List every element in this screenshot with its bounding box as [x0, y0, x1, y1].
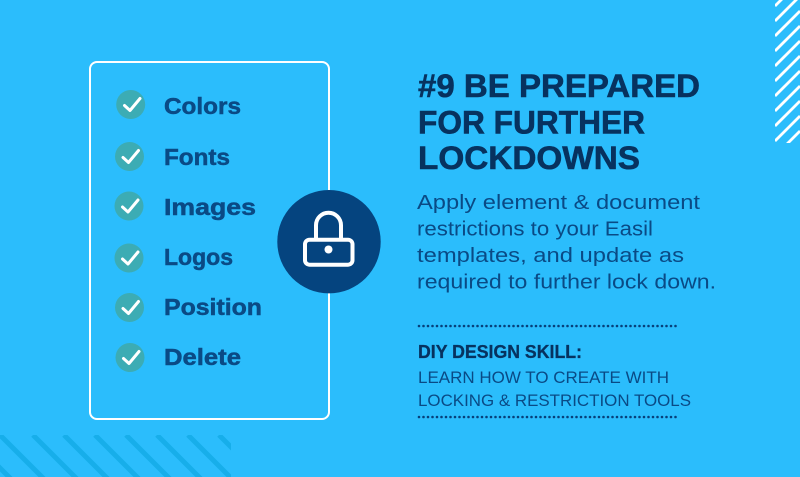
checklist item: Logos: Logos	[164, 244, 233, 270]
panel outline	[90, 62, 329, 419]
checklist item: Logos	[114, 244, 233, 272]
heading: FOR FURTHER	[418, 104, 645, 140]
checklist item: Delete	[116, 343, 241, 372]
body text	[417, 192, 716, 294]
checklist item: Delete: Delete	[164, 344, 241, 370]
checklist item: Images	[114, 192, 256, 220]
checklist item: Position	[115, 293, 262, 322]
body text: required to further lock down.	[417, 272, 716, 294]
callout: DIY design skill: LEARN HOW TO CREATE WITH	[418, 368, 669, 387]
heading: #9 BE PREPARED	[418, 68, 700, 104]
callout: DIY design skill: LOCKING & RESTRICTION TOOLS	[418, 391, 691, 410]
checklist item: Images: Images	[164, 194, 256, 220]
heading	[418, 68, 700, 176]
decorative stripes: bottom left	[0, 435, 231, 477]
callout: DIY design skill	[418, 341, 691, 410]
checklist item: Fonts	[115, 142, 230, 171]
panel: restrictions checklist	[90, 62, 329, 419]
body text: templates, and update as	[417, 245, 684, 267]
decorative stripes: top right	[775, 0, 800, 145]
checklist item: Colors	[116, 90, 241, 119]
checklist item: Colors: Colors	[164, 93, 241, 119]
callout: DIY design skill: DIY DESIGN SKILL:	[418, 341, 582, 362]
checklist item: Fonts: Fonts	[164, 144, 230, 170]
body text: Apply element & document	[417, 192, 701, 214]
checklist item: Position: Position	[164, 294, 262, 320]
icon: padlock badge	[277, 190, 381, 293]
heading: LOCKDOWNS	[418, 140, 640, 176]
body text: restrictions to your Easil	[417, 218, 653, 240]
